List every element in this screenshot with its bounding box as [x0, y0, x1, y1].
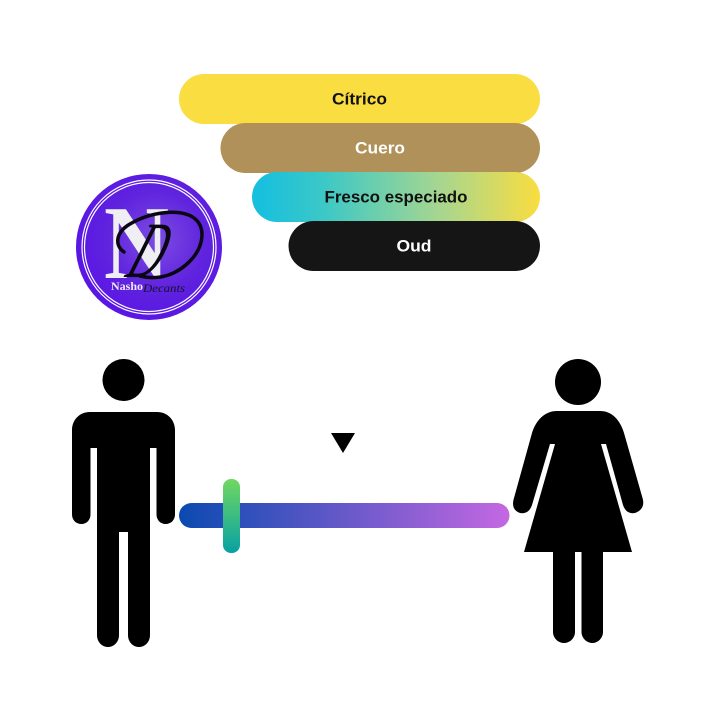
icon: woman — [513, 359, 643, 643]
logo word Decants: Decants — [142, 281, 185, 295]
logo: Nasho Decants badge — [76, 174, 222, 320]
accord: Cuero — [220, 123, 540, 173]
panel: scent accords — [179, 74, 540, 271]
logo letter D: D — [116, 206, 185, 295]
logo word Nasho: Nasho — [111, 279, 143, 293]
chart: gender scale bar — [179, 503, 510, 528]
accord: Cítrico: Cítrico — [332, 90, 387, 108]
accord: Cuero: Cuero — [355, 140, 405, 158]
icon: man — [72, 359, 175, 647]
accord: Fresco especiado — [252, 172, 540, 222]
accord: Oud: Oud — [396, 238, 432, 256]
marker: triangle pointer — [331, 433, 355, 453]
chart: scale position marker — [223, 479, 240, 553]
logo letter N: N — [104, 184, 169, 301]
accord: Oud — [288, 221, 540, 271]
accord: Fresco especiado: Fresco especiado — [324, 188, 468, 206]
logo flourish loop — [118, 212, 202, 278]
accord: Cítrico — [179, 74, 540, 124]
